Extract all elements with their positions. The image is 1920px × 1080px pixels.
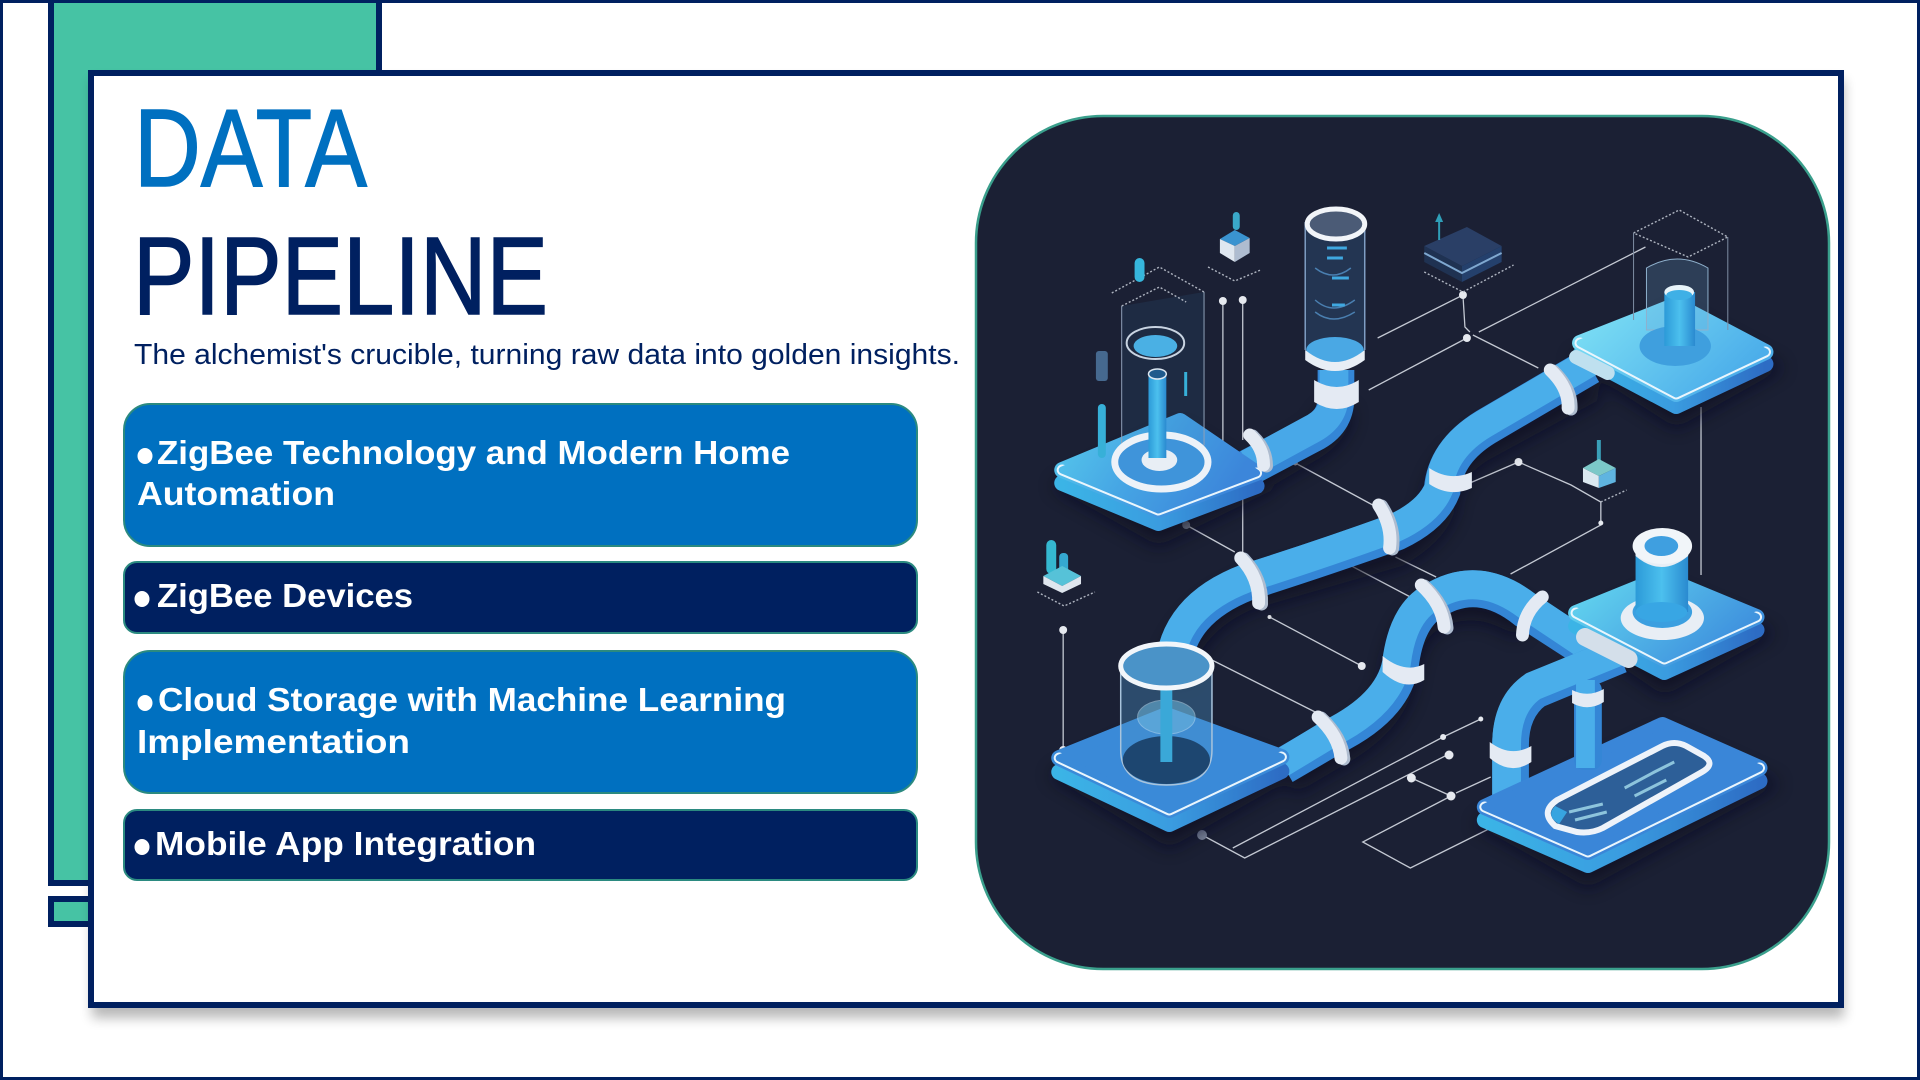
soft shadows xyxy=(1058,362,1776,888)
item 3 xyxy=(124,651,917,793)
item 2 xyxy=(124,562,917,633)
glass column: top right xyxy=(1634,210,1728,366)
green lower strip xyxy=(51,899,111,924)
pipe: tube to platform xyxy=(1248,370,1336,468)
pipe: vertical feed xyxy=(1574,680,1602,770)
platform: top right xyxy=(1580,305,1766,406)
small cube: top xyxy=(1208,212,1261,281)
glass tube: top xyxy=(1305,209,1365,371)
chip: top centre xyxy=(1424,213,1514,292)
title word: PIPELINE: PIPELINE xyxy=(133,215,548,338)
pipe: lower loop xyxy=(1281,585,1595,766)
platform: top left xyxy=(1062,421,1257,523)
glass cylinder: bottom left xyxy=(1121,644,1212,785)
item 1 xyxy=(124,404,917,546)
pipe: main upper xyxy=(1169,362,1590,670)
item 1: ZigBee Technology and Modern Home xyxy=(157,434,790,471)
small cube: right xyxy=(1583,440,1627,502)
main card xyxy=(91,73,1841,1005)
platform: app base xyxy=(1485,725,1760,865)
connector lines xyxy=(1059,247,1701,868)
item 4 xyxy=(124,810,917,880)
platform: bottom left xyxy=(1059,715,1281,824)
item 1: Automation xyxy=(137,475,335,512)
glass column: top left xyxy=(1112,267,1208,489)
item 4: Mobile App Integration xyxy=(155,825,536,862)
column: mid right xyxy=(1621,528,1704,640)
pipe: to app platform xyxy=(1507,651,1620,810)
subtitle: The alchemist's crucible, turning raw data into golden insights. xyxy=(134,339,960,371)
small bars: top left xyxy=(1096,258,1187,458)
title word: DATA: DATA xyxy=(134,87,368,210)
item 3: Implementation xyxy=(137,723,410,760)
item 3: Cloud Storage with Machine Learning xyxy=(158,681,786,718)
item 2: ZigBee Devices xyxy=(157,577,413,614)
pipe clamps xyxy=(1241,357,1629,768)
main card shadow xyxy=(92,80,1844,1018)
title xyxy=(133,87,548,338)
illustration panel: data pipeline xyxy=(976,116,1829,969)
platform: mid right xyxy=(1576,578,1757,672)
green backing panel xyxy=(51,0,379,883)
small cube: left xyxy=(1037,540,1095,606)
phone on app base xyxy=(1548,743,1709,832)
